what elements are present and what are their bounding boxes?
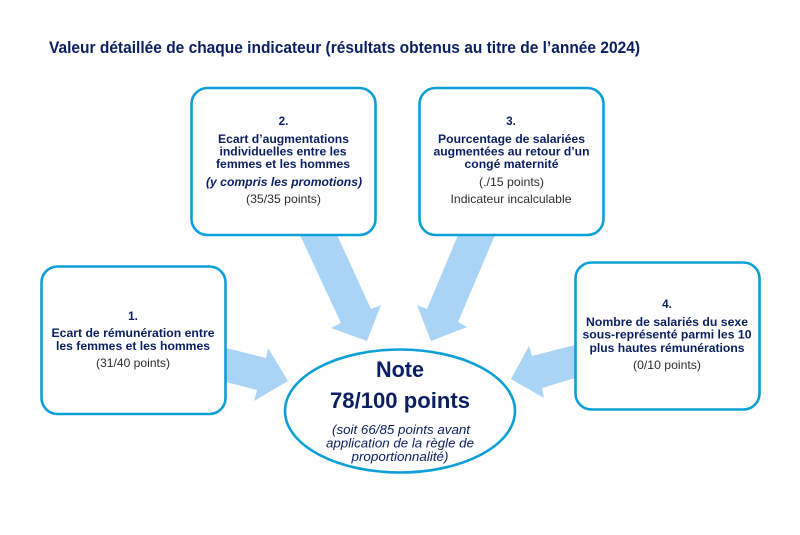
score note: application de la règle de <box>326 436 474 450</box>
indicator 2 qualifier: (y compris les promotions) <box>206 176 362 189</box>
score note: proportionnalité) <box>350 449 448 464</box>
indicator 4 heading: plus hautes rémunérations <box>590 342 745 355</box>
indicator 1 points: (31/40 points) <box>96 357 170 370</box>
indicator 3 heading: Pourcentage de salariées <box>438 133 586 146</box>
panel: total score ellipse <box>285 350 515 472</box>
indicator 4 points: (0/10 points) <box>633 359 701 372</box>
indicator 2 heading: individuelles entre les <box>220 146 347 158</box>
arrow: indicator 4 to note <box>511 345 575 398</box>
indicator 3 heading: augmentées au retour d’un <box>434 146 590 158</box>
indicator 3 points: (./15 points) <box>479 176 544 189</box>
indicator 3 number: 3. <box>506 115 516 128</box>
indicator 4 heading <box>582 316 752 355</box>
score note: (soit 66/85 points avant <box>332 422 471 437</box>
panel: indicator 1 <box>42 266 226 414</box>
score heading: Note <box>376 357 424 382</box>
indicator 2 number: 2. <box>279 115 288 128</box>
arrow: indicator 2 to note <box>300 235 381 341</box>
indicator 1 heading: les femmes et les hommes <box>56 340 211 353</box>
indicator 3 status: Indicateur incalculable <box>450 193 572 206</box>
indicator 4 heading: Nombre de salariés du sexe <box>586 316 749 329</box>
indicator 2 heading: femmes et les hommes <box>216 158 351 171</box>
arrow: indicator 3 to note <box>417 235 495 341</box>
panel: indicator 2 <box>192 88 376 235</box>
indicator 4 number: 4. <box>662 298 672 311</box>
indicator 1 number: 1. <box>128 310 138 323</box>
indicator 3 heading: congé maternité <box>464 158 559 171</box>
arrow: indicator 1 to note <box>226 348 288 401</box>
indicator 4 heading: sous-représenté parmi les 10 <box>582 328 752 342</box>
indicator 3 heading <box>434 133 590 171</box>
panel: indicator 3 <box>420 88 604 235</box>
score note <box>326 422 474 464</box>
indicator 1 heading <box>52 327 215 353</box>
panel: indicator 4 <box>576 262 760 410</box>
title: Valeur détaillée de chaque indicateur (résultats obtenus au titre de l’année 2024) <box>49 39 640 57</box>
indicator 2 heading <box>216 133 351 171</box>
indicator 1 heading: Ecart de rémunération entre <box>52 327 215 340</box>
indicator 2 heading: Ecart d’augmentations <box>218 133 350 146</box>
indicator 2 points: (35/35 points) <box>246 193 321 206</box>
score value: 78/100 points <box>330 388 470 413</box>
